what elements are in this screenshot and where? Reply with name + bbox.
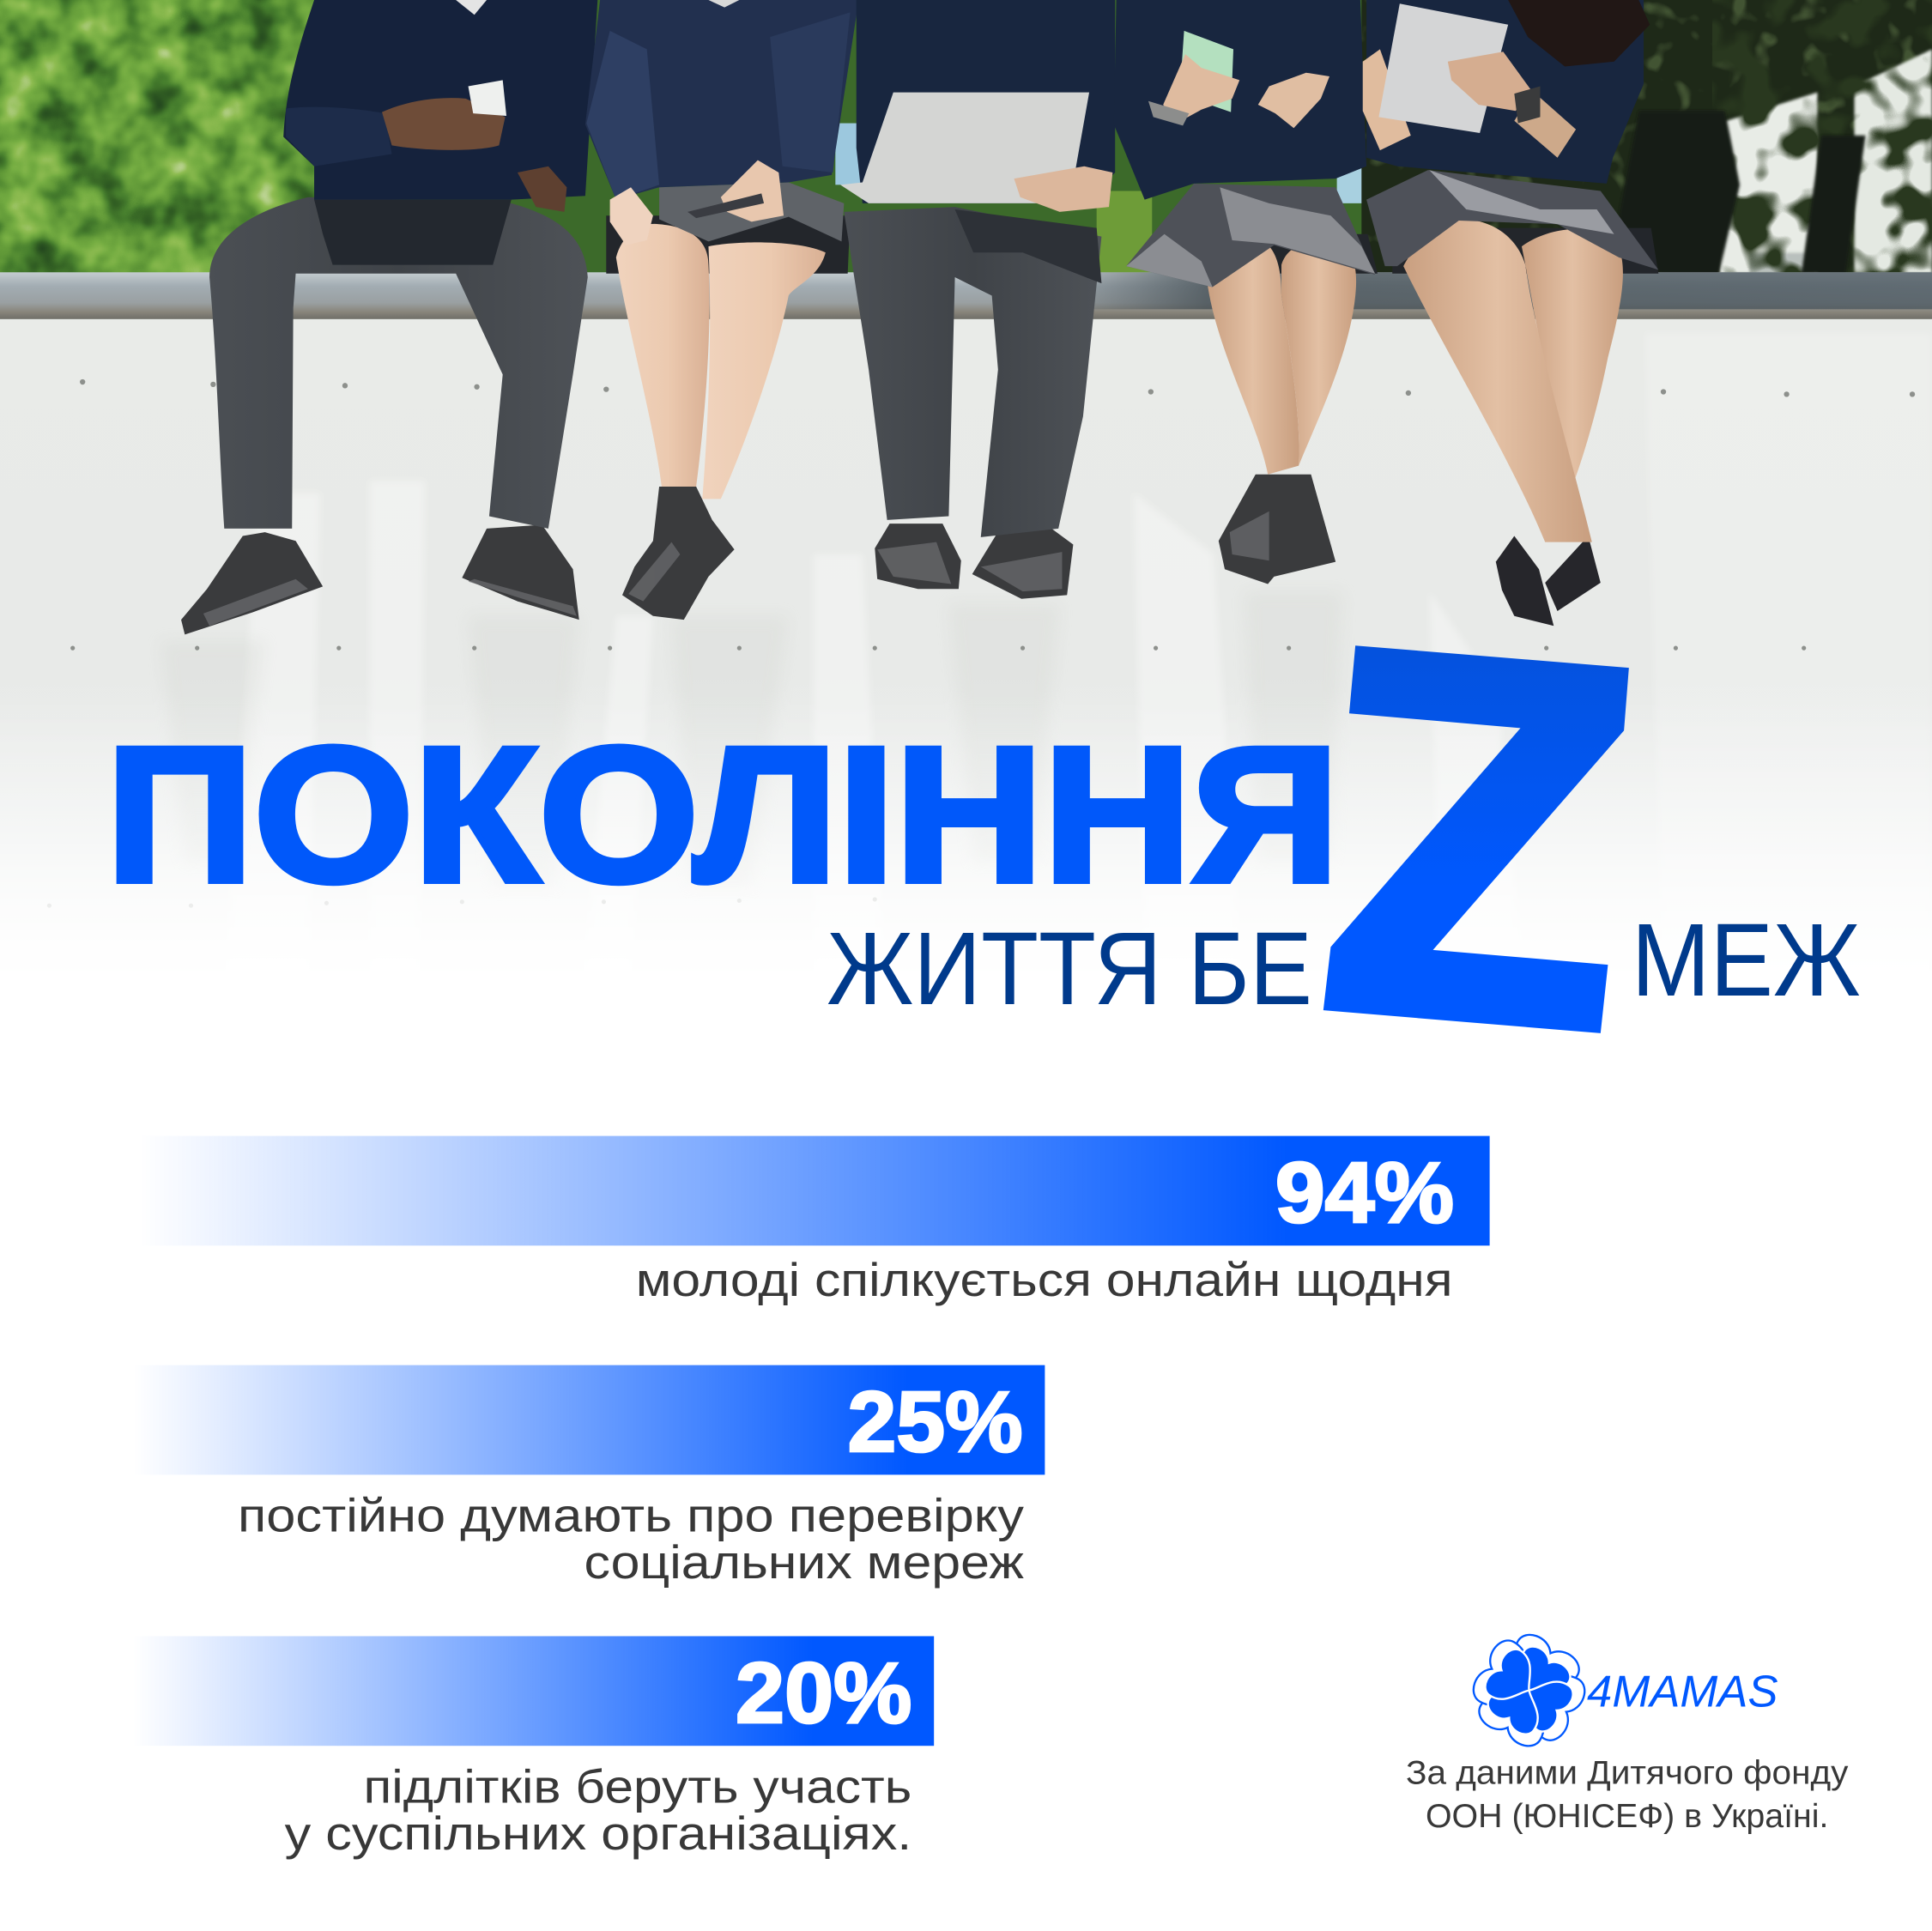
legs skin: [616, 220, 1623, 542]
wall streaks: [221, 333, 1932, 1023]
under-skirt shadows: [606, 215, 1658, 274]
subtitle: ЖИТТЯ БЕ: ЖИТТЯ БЕ: [827, 911, 1312, 1026]
logo wordmark: 4MAMAS: [1587, 1666, 1778, 1716]
caption 25%: соціальних мереж: [584, 1536, 1025, 1589]
boy 1: [209, 0, 597, 529]
icon: clover of hearts: [1468, 1629, 1590, 1752]
wall cap: [0, 272, 1932, 319]
girl 4: [1114, 0, 1375, 287]
subtitle: МЕЖ: МЕЖ: [1632, 902, 1861, 1018]
value 94%: 94%: [1275, 1145, 1454, 1241]
big letter Z: [1323, 645, 1629, 1033]
bar 20%: [133, 1636, 934, 1746]
center boy with laptop: [840, 0, 1115, 537]
stat 20%: [133, 1636, 934, 1860]
value 25%: 25%: [848, 1374, 1023, 1470]
stat 25%: [133, 1365, 1045, 1589]
caption 20%: у суспільних організаціях.: [285, 1807, 911, 1860]
foliage between: [314, 0, 1374, 274]
tree right: [1361, 0, 1932, 274]
bar 25%: [133, 1365, 1045, 1474]
source note: За даними Дитячого фонду: [1406, 1755, 1849, 1792]
logo: 4MAMAS: [1468, 1629, 1778, 1752]
image fade: [0, 690, 1932, 1029]
tree trunks: [1608, 111, 1865, 274]
value 20%: 20%: [736, 1645, 911, 1741]
title: ПОКОЛІННЯ: ПОКОЛІННЯ: [106, 707, 1339, 922]
shoes: [181, 475, 1601, 634]
caption 94%: молоді спілкується онлайн щодня: [636, 1254, 1453, 1306]
caption 25%: постійно думають про перевірку: [238, 1489, 1025, 1541]
stat 94%: [139, 1136, 1490, 1306]
concrete wall: [0, 318, 1932, 1026]
wall bolts: [70, 379, 1915, 651]
foliage left: [0, 0, 320, 274]
caption 25%: [238, 1489, 1025, 1589]
caption 20%: підлітків беруть участь: [363, 1760, 911, 1813]
shoe highlights: [203, 512, 1269, 626]
girl 2: [585, 0, 859, 245]
bar 94%: [139, 1136, 1490, 1245]
source note: [1406, 1755, 1849, 1835]
caption 20%: [285, 1760, 911, 1860]
girl 5: [1363, 0, 1658, 269]
source note: ООН (ЮНІСЕФ) в Україні.: [1426, 1798, 1828, 1835]
